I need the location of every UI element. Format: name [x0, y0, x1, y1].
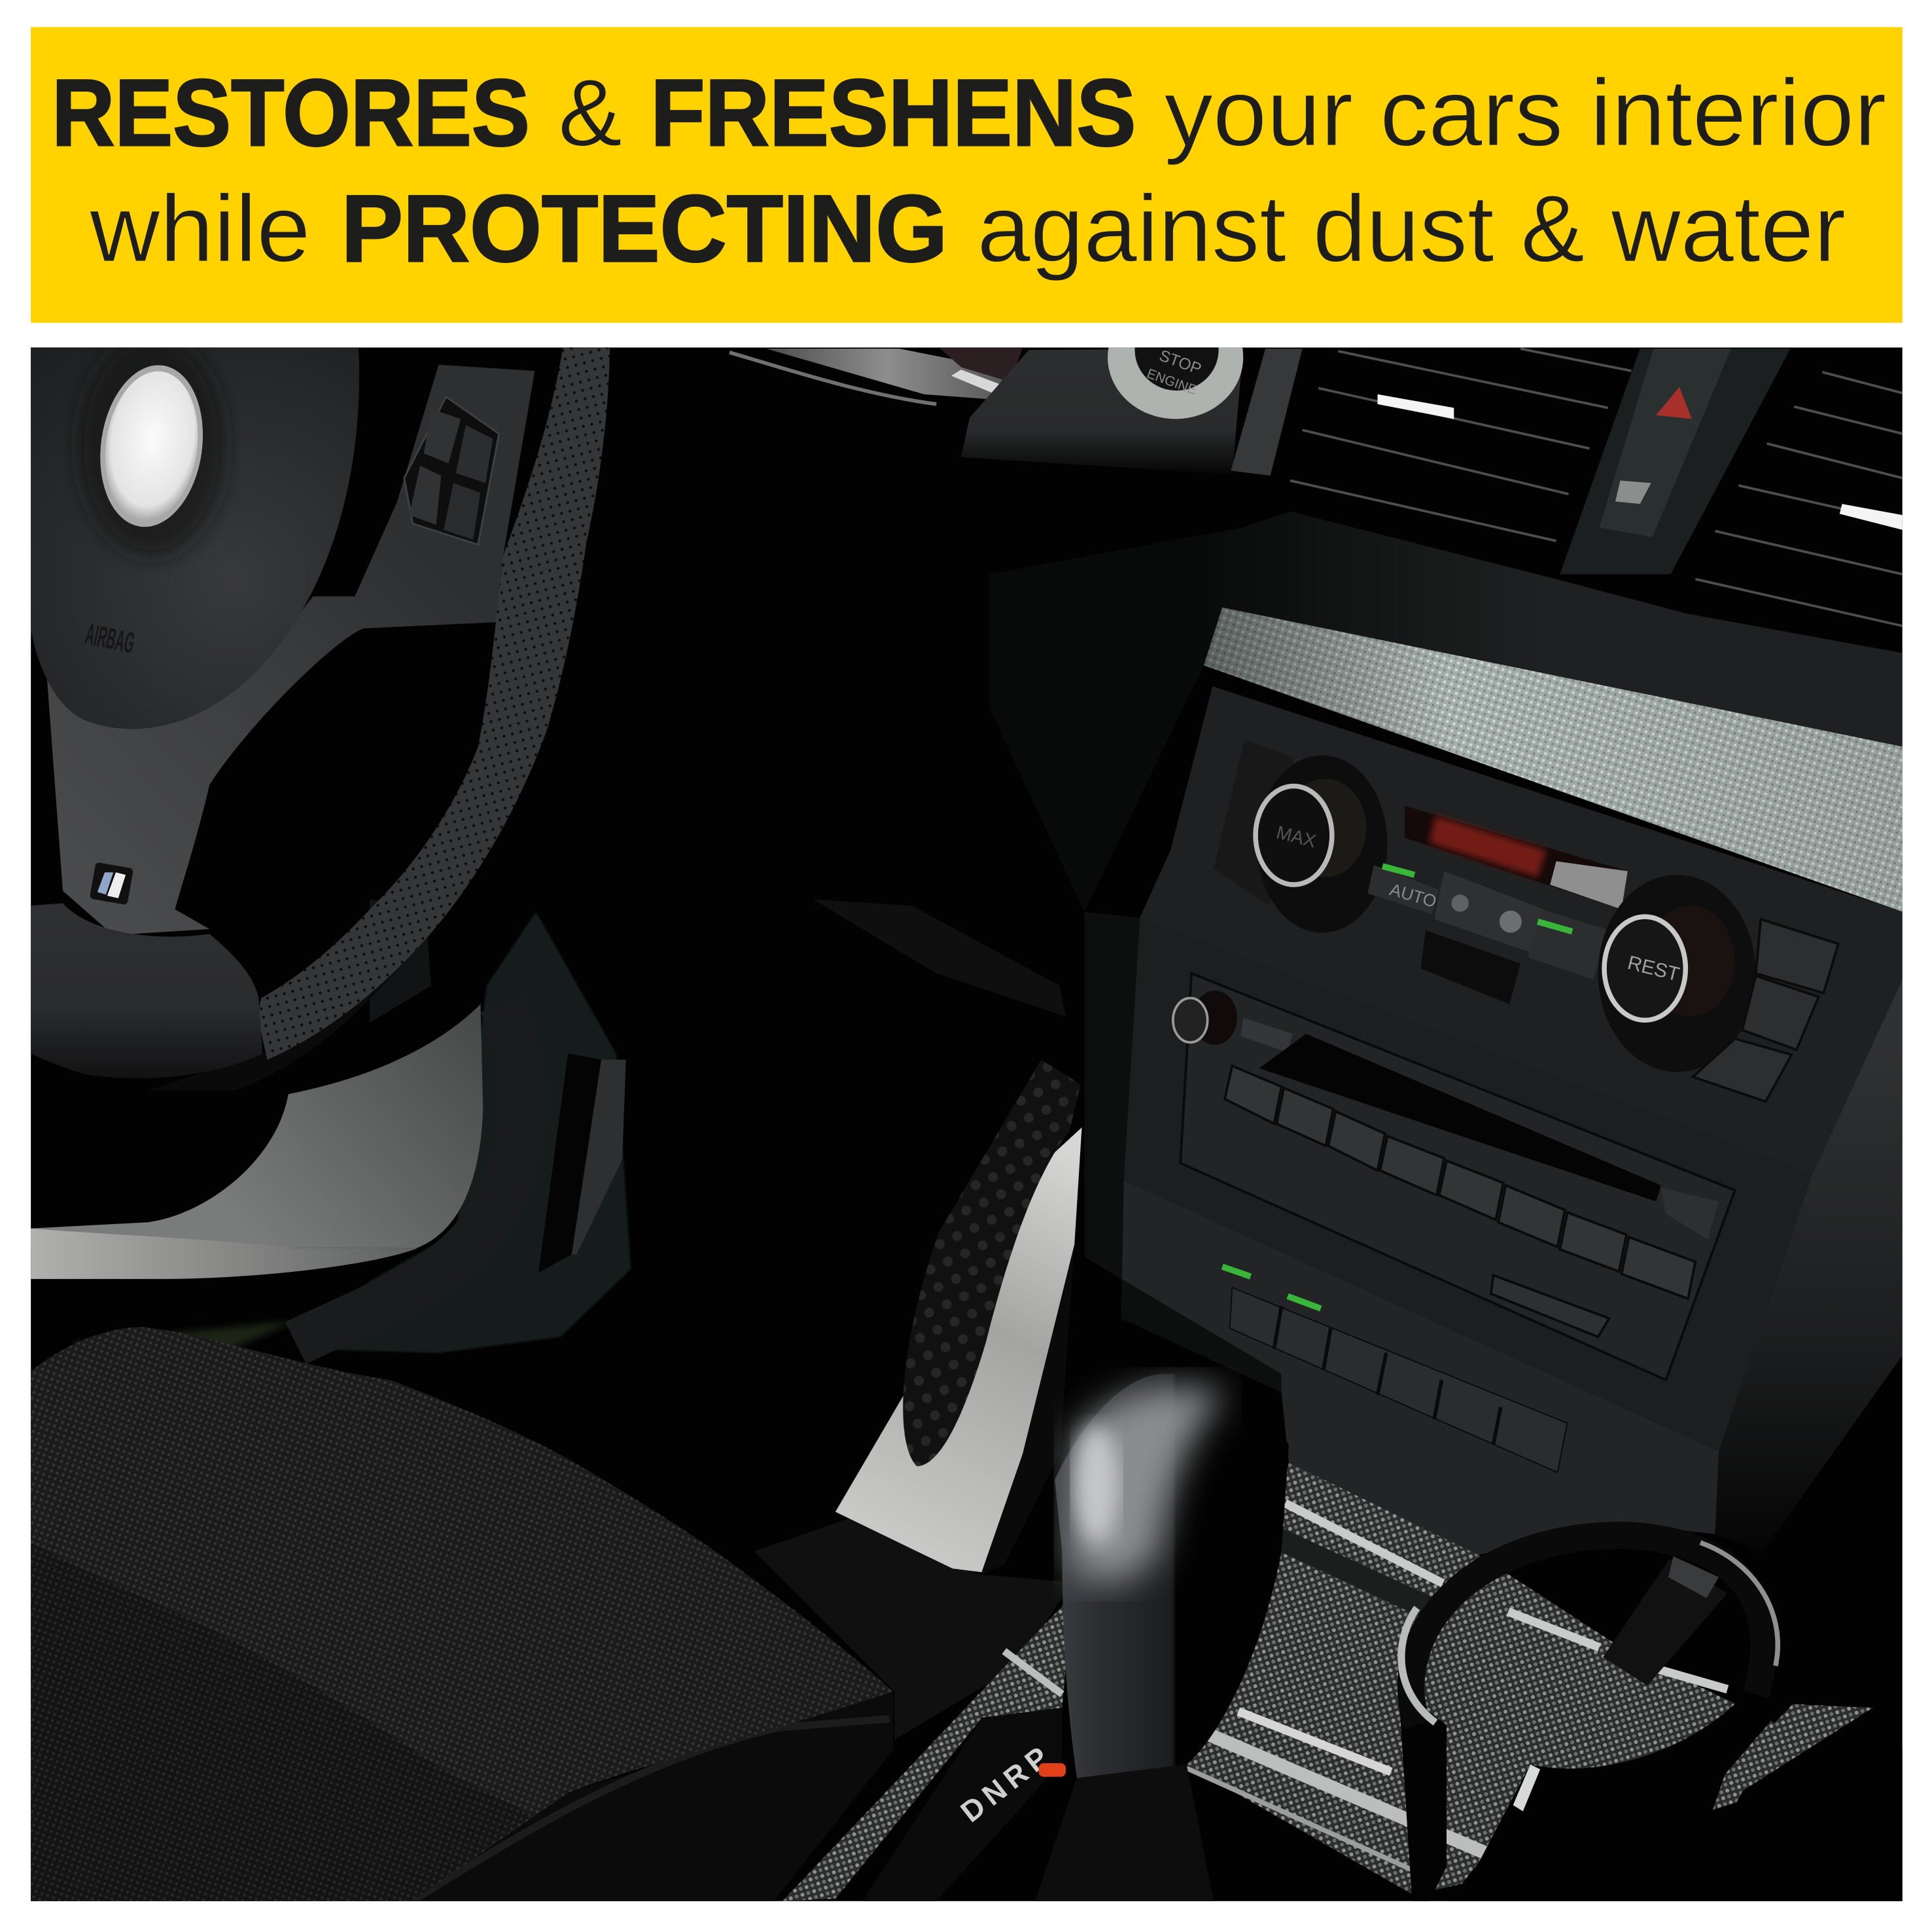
- headline line one: your cars interior: [1165, 60, 1886, 166]
- climate buttons: [1367, 865, 1609, 1004]
- track buttons: [1491, 1275, 1609, 1337]
- steering wheel buttons: [404, 396, 499, 544]
- headline line two: against dust & water: [977, 175, 1846, 281]
- climate buttons: AUTO: [1388, 879, 1439, 911]
- dash vents: [1290, 349, 1903, 626]
- preset buttons: [1225, 1066, 1695, 1299]
- under-dash shape: [813, 900, 1066, 1017]
- floor: [754, 1518, 1072, 1740]
- radio knob: [1173, 991, 1237, 1045]
- ring glint: [1513, 1765, 1540, 1811]
- airbag cover: [31, 347, 359, 729]
- headline line one: RESTORES: [52, 60, 530, 166]
- pedal: [835, 1060, 1082, 1575]
- left console edge: [1084, 912, 1282, 1392]
- perforated wheel rim: [259, 346, 610, 1060]
- start button: STOP: [1157, 347, 1204, 378]
- hazard switch column: [1560, 349, 1790, 574]
- left vent mode buttons: [1214, 739, 1293, 905]
- eject button: [1240, 1018, 1293, 1052]
- climate display: [1405, 806, 1628, 909]
- seat leather bolster: [412, 1692, 893, 1901]
- gear selector: D N R P: [955, 1740, 1055, 1829]
- cup holder: [1399, 1536, 1903, 1901]
- climate right knob: [1598, 875, 1756, 1072]
- ring: [1411, 1536, 1764, 1725]
- gear selector: [862, 1708, 1066, 1901]
- headline line one: &: [558, 60, 622, 166]
- headline banner: [31, 27, 1903, 323]
- right leather side: [1715, 979, 1903, 1553]
- rubber door seal: [296, 1004, 522, 1343]
- seat: [31, 1327, 893, 1901]
- steering wheel: AIRBAG: [82, 617, 137, 660]
- headline line two: [89, 175, 1846, 281]
- chrome hub badge: [100, 365, 203, 527]
- silver stripes: [1285, 1503, 1443, 1583]
- climate control panel: [1140, 686, 1903, 1174]
- start button: [1108, 296, 1243, 419]
- lower black body: [1448, 1682, 1903, 1901]
- vent divider strip: [1231, 349, 1303, 476]
- headline line two: PROTECTING: [342, 175, 947, 281]
- far right carbon: [1713, 1704, 1873, 1810]
- gear boot: [1035, 1765, 1214, 1901]
- smooth lower wheel section: [31, 903, 262, 1078]
- textured dash with start button: [961, 347, 1302, 476]
- carbon console trim: [782, 1462, 1873, 1901]
- start button: ENGINE: [1145, 366, 1199, 398]
- instrument cluster: [729, 347, 1023, 404]
- cd slot: [1259, 1034, 1719, 1240]
- headline line one: [52, 60, 1886, 166]
- door panel grey area: [31, 1004, 483, 1248]
- door sill and lower door: [31, 900, 631, 1356]
- lower dash: [989, 512, 1903, 912]
- seat cushion fabric: [31, 1327, 893, 1901]
- M badge: [90, 862, 133, 905]
- dark band in trim: [1276, 1528, 1443, 1624]
- steering wheel: [31, 335, 610, 1091]
- shifter highlights: [1070, 1387, 1226, 1582]
- radio panel: [1124, 918, 1812, 1452]
- climate left knob: MAX: [1274, 821, 1318, 851]
- wheel spokes: [46, 364, 535, 935]
- headline line two: while: [89, 175, 311, 281]
- bright door strip: [31, 1229, 417, 1279]
- climate side buttons: [1693, 919, 1838, 1102]
- pedal rubber pad: [903, 1060, 1081, 1466]
- silver trim strip: [1204, 607, 1903, 912]
- wheel rim lower shadow: [369, 347, 607, 1000]
- gear shifter: [1035, 1374, 1289, 1901]
- seat heating switch panel: [1121, 1180, 1719, 1555]
- climate right knob: REST: [1625, 952, 1681, 985]
- headline line one: FRESHENS: [650, 60, 1136, 166]
- cup strap: [1603, 1558, 1727, 1685]
- climate left knob: [1256, 755, 1388, 933]
